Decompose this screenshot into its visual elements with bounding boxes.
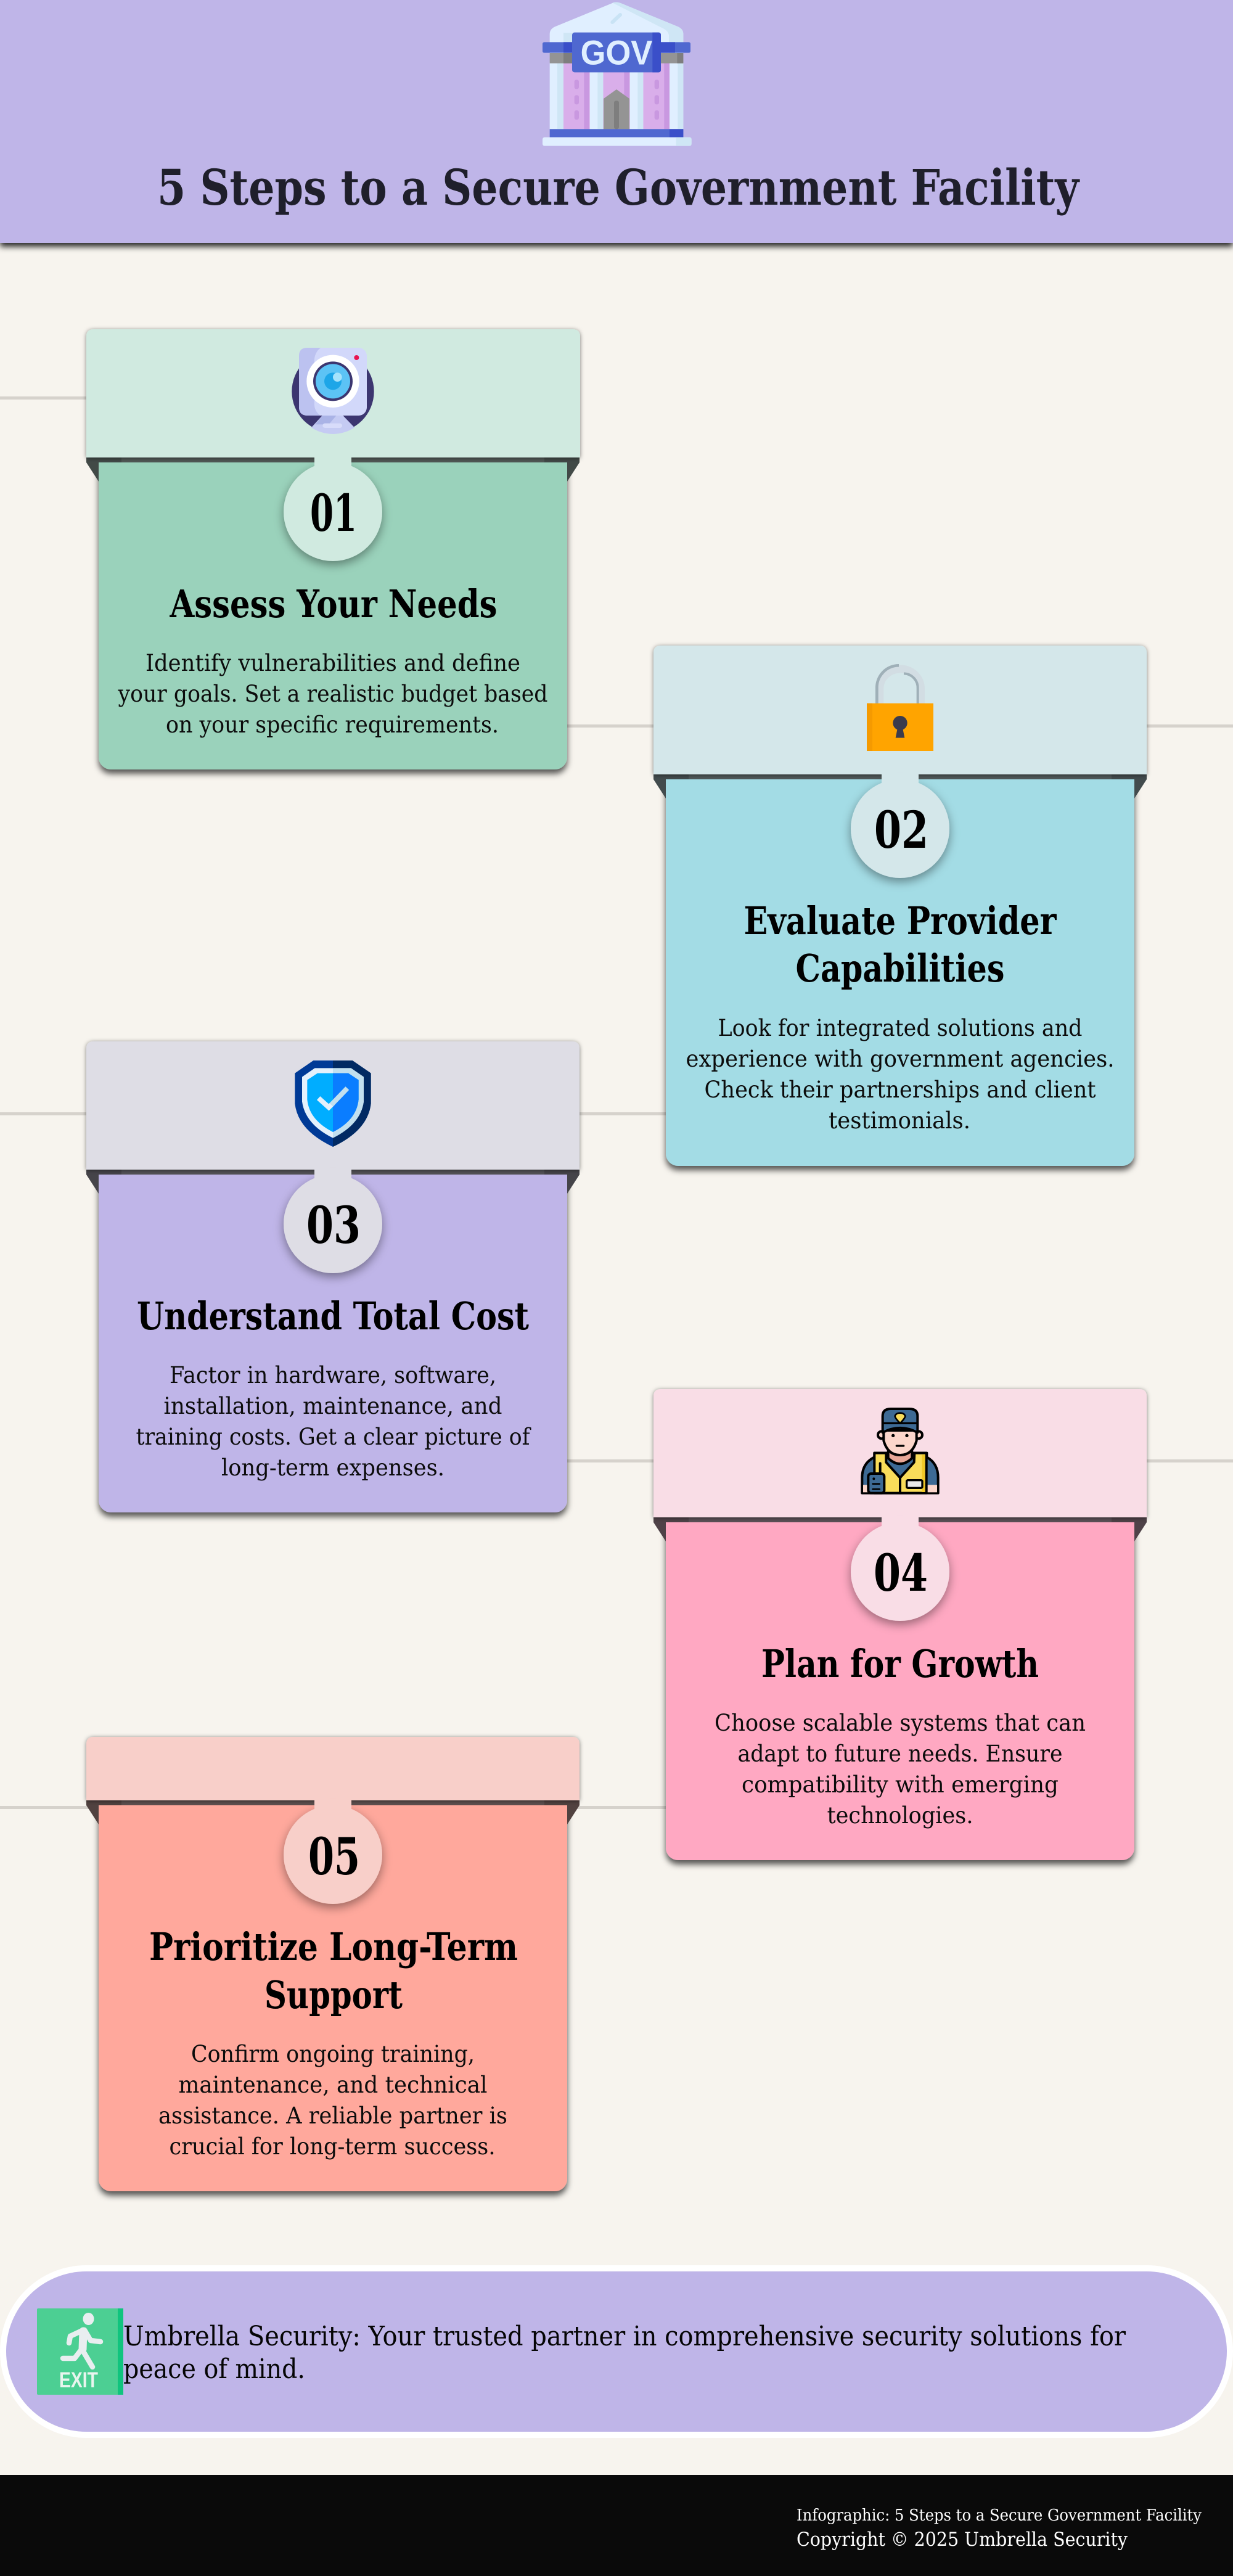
description: assistance. A reliable partner is <box>158 2102 507 2129</box>
panel: step 01 <box>86 329 580 769</box>
heading: Understand Total Cost <box>137 1294 529 1339</box>
heading <box>743 898 1057 991</box>
card body <box>99 1802 567 2191</box>
panel: step 03 <box>86 1041 580 1512</box>
description: long-term expenses. <box>221 1454 444 1481</box>
description <box>136 1362 531 1481</box>
callout banner <box>0 2265 1233 2438</box>
description: installation, maintenance, and <box>164 1393 502 1419</box>
closing statement <box>123 2321 1126 2385</box>
card body <box>99 1171 567 1512</box>
number badge <box>284 456 382 561</box>
panel: step 05 <box>86 1737 580 2191</box>
description: Choose scalable systems that can <box>715 1710 1086 1736</box>
description: crucial for long-term success. <box>169 2133 496 2160</box>
card body <box>666 1519 1134 1860</box>
icon: shield with check <box>295 1060 371 1147</box>
description: Look for integrated solutions and <box>718 1015 1083 1041</box>
panel: step 04 <box>653 1389 1147 1860</box>
header banner <box>0 0 1233 243</box>
closing statement: peace of mind. <box>123 2353 305 2385</box>
footer title: Infographic: 5 Steps to a Secure Government Facility <box>797 2506 1202 2525</box>
card header <box>653 1389 1147 1517</box>
heading: Prioritize Long-Term <box>149 1924 518 1969</box>
icon: exit sign: EXIT <box>59 2368 98 2392</box>
description: Identify vulnerabilities and define <box>145 650 520 676</box>
number badge <box>851 773 949 878</box>
card header <box>86 329 580 457</box>
heading: Capabilities <box>795 946 1005 991</box>
description: technologies. <box>827 1802 973 1829</box>
description: Factor in hardware, software, <box>170 1362 496 1388</box>
description: training costs. Get a clear picture of <box>136 1424 531 1450</box>
number badge <box>284 1168 382 1273</box>
copyright: Copyright © 2025 Umbrella Security <box>797 2529 1128 2551</box>
icon: security camera <box>292 348 374 434</box>
icon: padlock <box>867 665 933 751</box>
number badge <box>284 1799 382 1904</box>
description: your goals. Set a realistic budget based <box>118 681 547 707</box>
heading: Assess Your Needs <box>170 581 497 626</box>
icon: exit sign <box>37 2308 123 2395</box>
number badge: 02 <box>874 801 928 860</box>
number badge <box>851 1516 949 1621</box>
number badge: 01 <box>310 484 357 543</box>
heading: Evaluate Provider <box>743 898 1057 943</box>
icon: government building <box>543 2 692 146</box>
heading: Support <box>264 1972 403 2017</box>
panel: step 02 <box>653 646 1147 1166</box>
description: on your specific requirements. <box>166 712 499 738</box>
icon: government building: GOV <box>581 34 652 72</box>
footer <box>0 2475 1233 2576</box>
number badge: 04 <box>874 1544 928 1603</box>
description: Check their partnerships and client <box>704 1077 1096 1103</box>
description <box>715 1710 1086 1829</box>
description <box>686 1015 1115 1134</box>
description <box>118 650 547 738</box>
heading <box>149 1924 518 2017</box>
description: experience with government agencies. <box>686 1046 1115 1072</box>
title: 5 Steps to a Secure Government Facility <box>157 158 1080 216</box>
heading: Plan for Growth <box>761 1641 1039 1686</box>
description: compatibility with emerging <box>742 1771 1059 1798</box>
card header <box>653 646 1147 774</box>
card header <box>86 1737 580 1800</box>
description: Confirm ongoing training, <box>191 2041 475 2067</box>
description: testimonials. <box>829 1107 970 1134</box>
card body <box>666 776 1134 1166</box>
description: adapt to future needs. Ensure <box>737 1741 1063 1767</box>
card body <box>99 459 567 769</box>
description <box>158 2041 507 2160</box>
number badge: 05 <box>308 1827 360 1887</box>
icon: security guard <box>862 1409 938 1493</box>
description: maintenance, and technical <box>179 2072 487 2098</box>
closing statement: Umbrella Security: Your trusted partner in comprehensive security solutions for <box>123 2321 1126 2352</box>
number badge: 03 <box>306 1196 361 1255</box>
card header <box>86 1041 580 1170</box>
